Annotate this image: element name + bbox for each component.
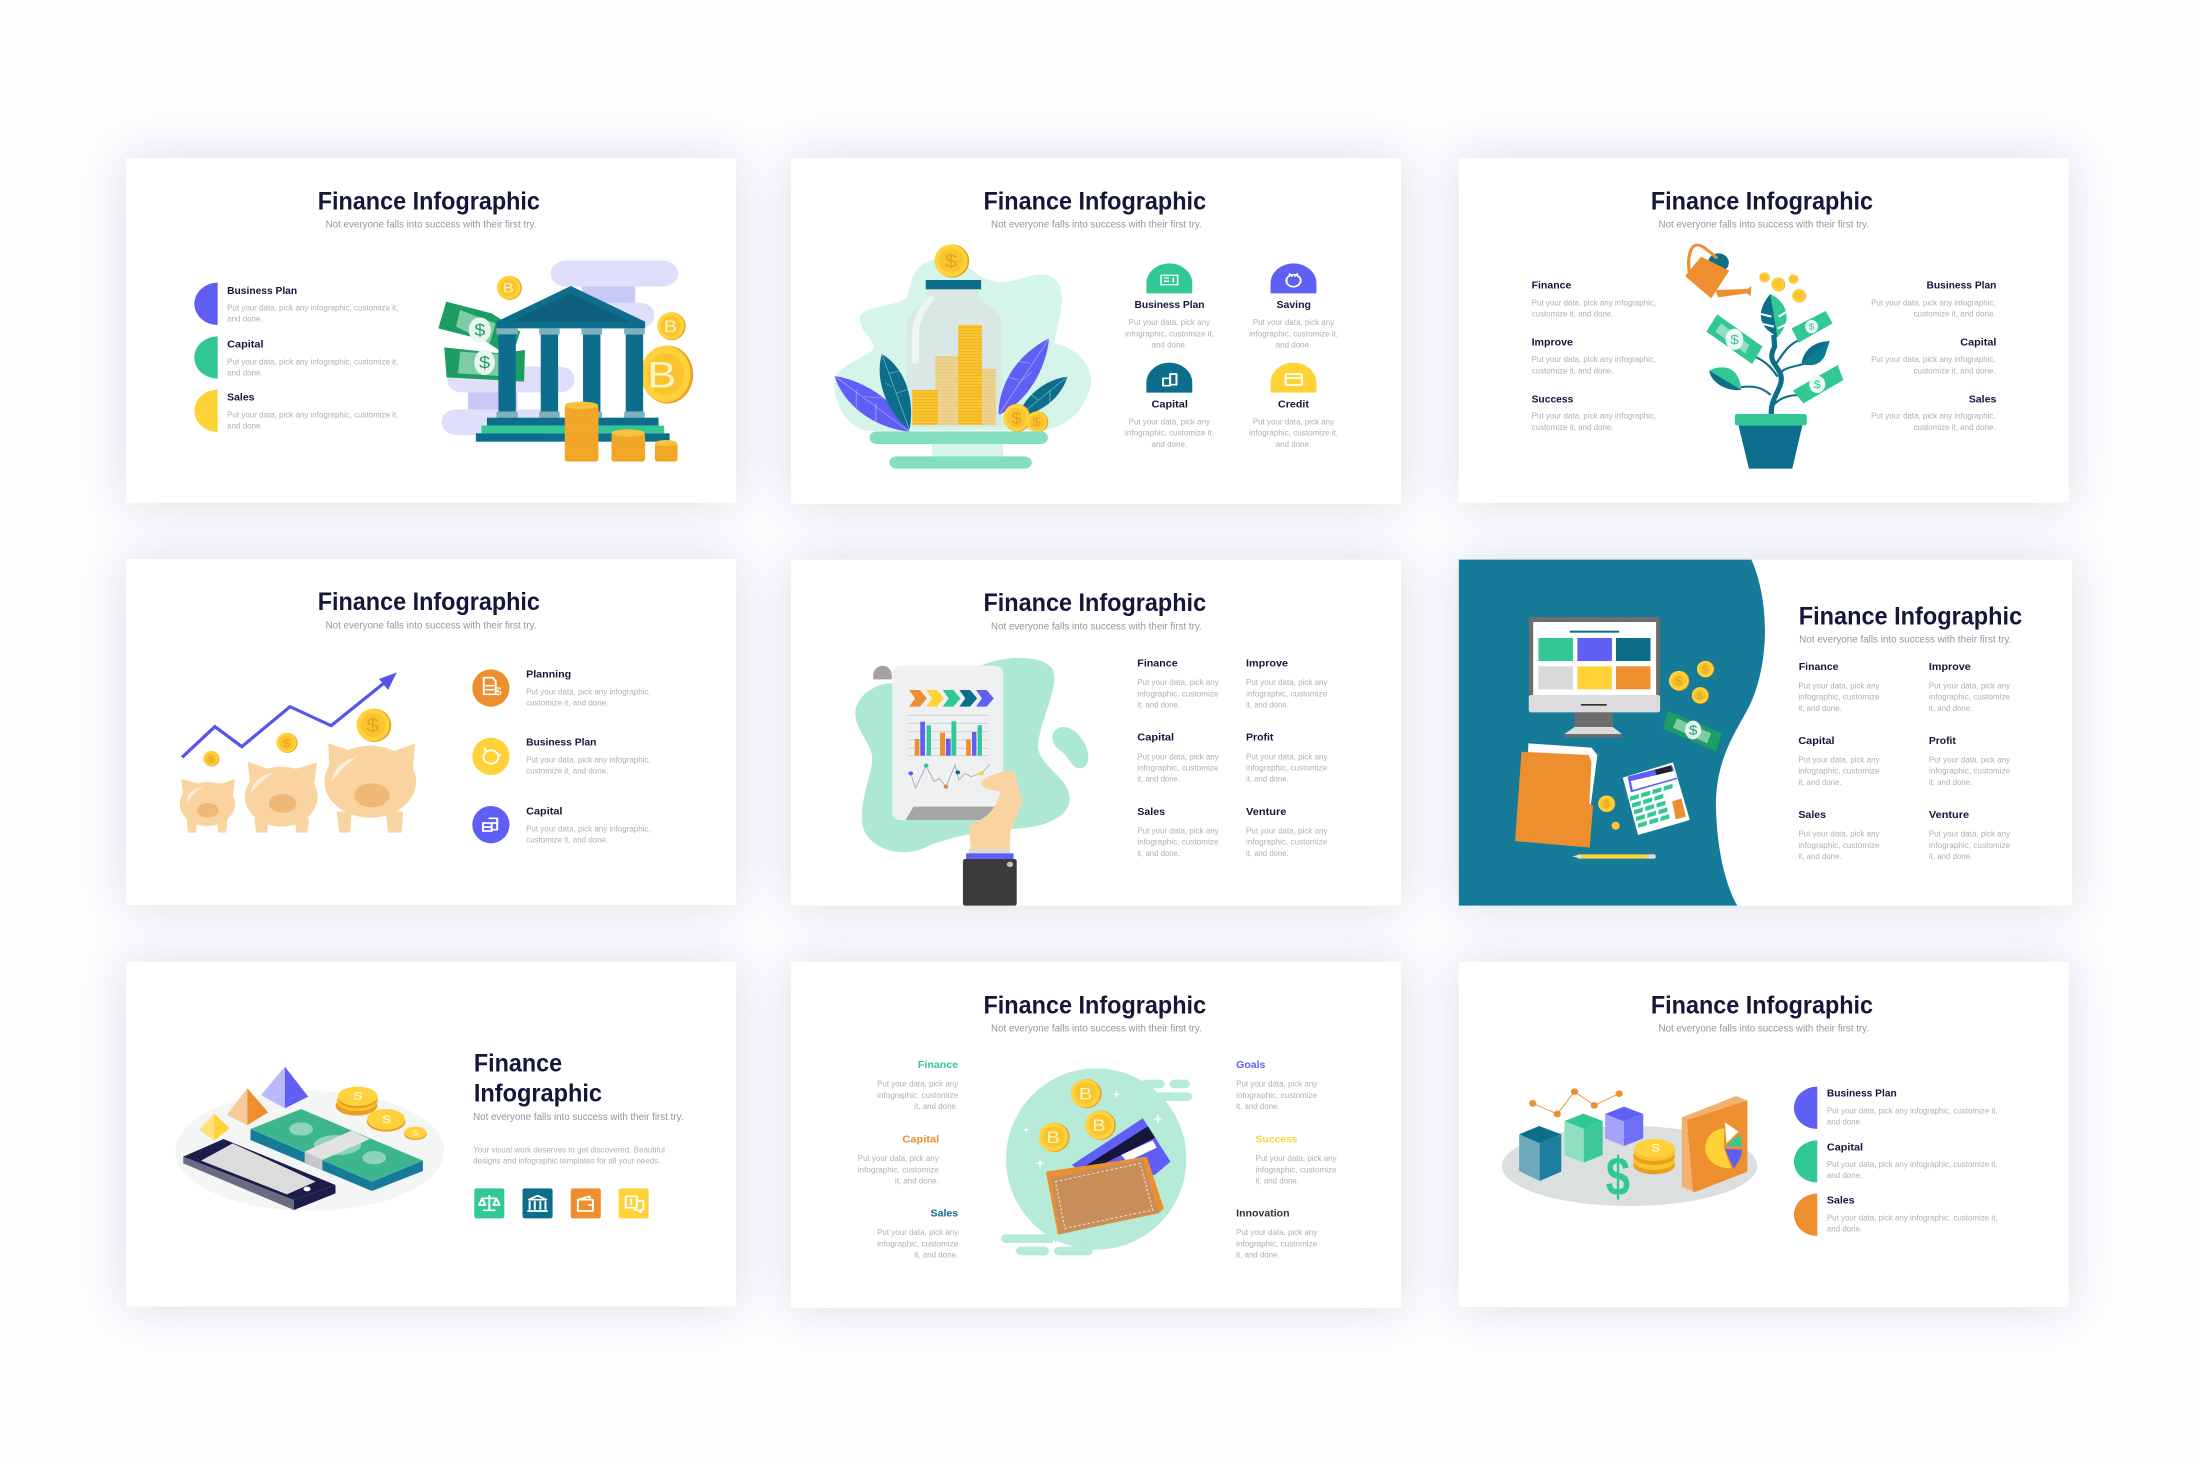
- illustration: phone, cash, coins and pyramids: S: [354, 1090, 363, 1102]
- text block: Improve: customize it, and done.: [1532, 366, 1614, 375]
- illustration: three piggy banks with coins: $: [208, 755, 215, 765]
- text block: Improve: infographic, customize: [1929, 692, 2010, 701]
- subtitle: Not everyone falls into success with their first try.: [473, 1112, 683, 1123]
- illustration: isometric bars, coins and book: S: [1651, 1142, 1660, 1154]
- text block: Capital: Put your data, pick any infographic, customize it,: [227, 357, 398, 366]
- panel: bank: [126, 158, 736, 503]
- text block: Sales: [1827, 1196, 1998, 1233]
- icon: scales: [474, 1188, 504, 1218]
- text block: Improve: [1929, 662, 2010, 713]
- illustration: bank with coins and money: $: [474, 320, 485, 339]
- text block: Finance: Put your data, pick any: [1137, 678, 1219, 687]
- text block: Success: Success: [1532, 394, 1573, 405]
- text block: Success: [1532, 394, 1656, 432]
- title: Finance: [474, 1049, 562, 1077]
- text block: Business Plan: [1125, 300, 1214, 349]
- text block: Business Plan: Put your data, pick any infographic,: [1871, 298, 1996, 307]
- icon: half circle purple: [1794, 1087, 1817, 1129]
- text block: Capital: [526, 806, 651, 844]
- text block: description: [473, 1145, 665, 1165]
- panel: wallet: [791, 962, 1401, 1308]
- text block: Sales: it, and done.: [1798, 852, 1842, 861]
- text block: Improve: Put your data, pick any: [1246, 678, 1328, 687]
- text block: Planning: [526, 669, 651, 707]
- text block: Business Plan: Business Plan: [227, 286, 297, 297]
- text block: Business Plan: [227, 286, 398, 323]
- panel: report in hand: [791, 560, 1401, 906]
- text block: Success: customize it, and done.: [1532, 423, 1614, 432]
- text block: Capital: Capital: [1137, 732, 1174, 743]
- illustration: phone, cash, coins and pyramids: S: [412, 1129, 418, 1137]
- illustration: bank with coins and money: [438, 261, 693, 462]
- text block: Capital: Put your data, pick any infographic,: [526, 824, 651, 833]
- text block: Improve: Put your data, pick any: [1929, 681, 2010, 690]
- text block: Planning: Put your data, pick any infographic,: [526, 687, 651, 696]
- text block: Sales: customize it, and done.: [1914, 423, 1996, 432]
- text block: Profit: it, and done.: [1246, 774, 1289, 783]
- subtitle: Not everyone falls into success with their first try.: [991, 219, 1202, 230]
- text block: Finance: [1798, 662, 1880, 713]
- illustration: coins and banknote: [1598, 661, 1722, 830]
- text block: Finance: [1137, 658, 1219, 709]
- icon: half circle green: [194, 336, 218, 379]
- text block: Profit: infographic, customize: [1246, 763, 1327, 772]
- icon: piggy: [472, 738, 509, 775]
- icon: credit dome: [1271, 363, 1316, 393]
- text block: Capital: [1871, 338, 1996, 375]
- panel: piggy banks: [126, 559, 736, 905]
- illustration: coins and banknote: $: [1603, 799, 1610, 810]
- text block: Credit: [1249, 399, 1338, 449]
- text block: Planning: customize it, and done.: [526, 698, 608, 707]
- panel: money plant: [1459, 158, 2069, 503]
- icon: saving dome: [1271, 263, 1316, 293]
- text block: Venture: infographic, customize: [1929, 841, 2010, 850]
- text block: Capital: infographic, customize: [1137, 763, 1218, 772]
- text block: Sales: Sales: [227, 392, 254, 403]
- text block: Finance: [877, 1060, 959, 1111]
- text block: Venture: Put your data, pick any: [1929, 829, 2010, 838]
- text block: Business Plan: Put your data, pick any: [1129, 318, 1210, 327]
- text block: Credit: and done.: [1276, 440, 1311, 449]
- illustration: coin jar with leaves: $: [1033, 415, 1041, 429]
- text block: Sales: Sales: [1137, 807, 1165, 818]
- text block: Success: Success: [1256, 1134, 1297, 1145]
- background: teal wave: [1459, 560, 1765, 906]
- text block: Capital: Put your data, pick any infographic, customize it,: [1827, 1160, 1998, 1169]
- text block: Finance: infographic, customize: [1137, 689, 1218, 698]
- text block: Improve: [1246, 658, 1328, 709]
- text block: Credit: infographic, customize it,: [1249, 428, 1338, 437]
- text block: Capital: [1827, 1142, 1998, 1180]
- text block: Planning: Planning: [526, 669, 571, 680]
- title: Finance Infographic: [318, 587, 540, 615]
- text block: Venture: it, and done.: [1246, 849, 1289, 858]
- text block: Improve: Improve: [1929, 662, 1971, 673]
- text block: Capital: Capital: [1152, 399, 1188, 410]
- text block: Finance: it, and done.: [1798, 704, 1842, 713]
- text block: Improve: Put your data, pick any infographic,: [1532, 355, 1656, 364]
- text block: Capital: [1137, 732, 1219, 783]
- text block: Capital: and done.: [227, 368, 263, 377]
- text block: Business Plan: and done.: [1152, 340, 1187, 349]
- text block: Sales: Sales: [1827, 1196, 1855, 1206]
- text block: Profit: it, and done.: [1929, 778, 1972, 787]
- title: Finance Infographic: [1651, 187, 1873, 215]
- text block: Capital: infographic, customize: [858, 1165, 939, 1174]
- illustration: coin jar with leaves: $: [945, 251, 958, 272]
- text block: Finance: customize it, and done.: [1532, 309, 1614, 318]
- text block: Innovation: Innovation: [1236, 1208, 1290, 1219]
- text block: Capital: [1798, 736, 1880, 787]
- text block: Capital: customize it, and done.: [526, 835, 608, 844]
- text block: Sales: Put your data, pick any infographic, customize it,: [227, 410, 398, 419]
- text block: Profit: [1929, 736, 2010, 787]
- text block: Venture: Put your data, pick any: [1246, 826, 1328, 835]
- text block: Venture: Venture: [1929, 810, 1969, 821]
- illustration: watering can and money plant: [1685, 245, 1843, 469]
- icon: half circle green: [1794, 1140, 1817, 1183]
- text block: Finance: Finance: [1137, 658, 1178, 669]
- text block: Goals: Put your data, pick any: [1236, 1079, 1318, 1088]
- illustration: bank with coins and money: B: [503, 281, 514, 296]
- illustration: watering can and money plant: $: [1809, 322, 1815, 332]
- text block: description: Your visual work deserves to get discovered. Beautiful: [473, 1145, 665, 1154]
- illustration: isometric bars, coins and book: [1502, 1088, 1757, 1207]
- text block: Finance: Finance: [1799, 662, 1839, 673]
- panel: savings jar: [791, 158, 1401, 504]
- icon: capital dome: [1146, 363, 1192, 393]
- text block: Sales: infographic, customize: [1137, 837, 1218, 846]
- text block: Profit: Put your data, pick any: [1929, 755, 2010, 764]
- subtitle: Not everyone falls into success with their first try.: [1659, 1023, 1869, 1034]
- illustration: coin jar with leaves: [834, 244, 1091, 469]
- text block: Business Plan: Business Plan: [1135, 300, 1205, 311]
- text block: Venture: [1246, 807, 1328, 858]
- illustration: coins and banknote: $: [1689, 723, 1698, 737]
- text block: Capital: infographic, customize: [1798, 766, 1880, 775]
- text block: Venture: infographic, customize: [1246, 837, 1327, 846]
- text block: Sales: Put your data, pick any: [1137, 826, 1219, 835]
- text block: Capital: infographic, customize it,: [1125, 428, 1214, 437]
- text block: Finance: infographic, customize: [877, 1091, 958, 1100]
- text block: Success: Put your data, pick any: [1256, 1154, 1337, 1163]
- text block: Finance: Put your data, pick any: [1798, 681, 1880, 690]
- text block: Capital: customize it, and done.: [1914, 366, 1996, 375]
- text block: Profit: Profit: [1929, 736, 1956, 747]
- text block: Capital: Put your data, pick any: [1137, 752, 1219, 761]
- text block: Sales: infographic, customize: [877, 1239, 958, 1248]
- icon: half circle orange: [1794, 1194, 1817, 1236]
- text block: Sales: [877, 1208, 959, 1259]
- text block: Finance: Finance: [918, 1060, 958, 1071]
- subtitle: Not everyone falls into success with their first try.: [1659, 219, 1869, 230]
- illustration: coin jar with leaves: $: [1011, 410, 1022, 427]
- panel: isometric money: [126, 962, 736, 1307]
- text block: Sales: Put your data, pick any: [877, 1228, 959, 1237]
- title: Finance Infographic: [318, 187, 540, 215]
- subtitle: Not everyone falls into success with their first try.: [1799, 635, 2011, 645]
- text block: Saving: and done.: [1276, 340, 1311, 349]
- text block: Sales: it, and done.: [914, 1250, 958, 1259]
- text block: Business Plan: Business Plan: [526, 737, 597, 748]
- text block: Success: [1256, 1134, 1337, 1185]
- panel: isometric chart: [1459, 962, 2069, 1307]
- text block: Business Plan: [526, 737, 651, 775]
- text block: Goals: Goals: [1236, 1060, 1265, 1071]
- text block: Sales: [227, 392, 398, 430]
- text block: Capital: and done.: [1827, 1171, 1862, 1180]
- illustration: hand holding report: [855, 658, 1088, 906]
- text block: Business Plan: and done.: [227, 314, 263, 323]
- text block: Capital: Put your data, pick any: [1129, 417, 1210, 426]
- text block: Capital: it, and done.: [895, 1176, 939, 1185]
- text block: Improve: Improve: [1532, 338, 1573, 348]
- text block: Sales: Sales: [931, 1208, 958, 1219]
- subtitle: Not everyone falls into success with their first try.: [326, 620, 536, 631]
- text block: Business Plan: [1871, 281, 1997, 318]
- text block: Improve: it, and done.: [1929, 704, 1972, 713]
- subtitle: Not everyone falls into success with their first try.: [991, 621, 1202, 632]
- title: Finance Infographic: [983, 187, 1206, 215]
- icon: business plan dome: [1146, 263, 1192, 293]
- text block: Profit: [1246, 732, 1328, 783]
- text block: Capital: Capital: [526, 806, 562, 817]
- illustration: isometric bars, coins and book: $: [1606, 1146, 1630, 1207]
- title: Finance Infographic: [983, 991, 1206, 1019]
- icon: half circle blue: [194, 283, 218, 325]
- text block: Venture: Venture: [1246, 807, 1286, 818]
- text block: Capital: Capital: [1827, 1142, 1863, 1153]
- text block: Venture: it, and done.: [1929, 852, 1972, 861]
- icon: bank: [523, 1188, 553, 1218]
- title: Finance Infographic: [1651, 991, 1873, 1019]
- illustration: bank with coins and money: B: [664, 317, 677, 336]
- illustration: coins and banknote: $: [1702, 665, 1708, 675]
- text block: Credit: Credit: [1278, 399, 1309, 410]
- text block: Capital: Capital: [1798, 736, 1835, 747]
- illustration: phone, cash, coins and pyramids: [175, 1067, 444, 1211]
- text block: Sales: [1798, 810, 1880, 861]
- text block: Sales: infographic, customize: [1798, 841, 1880, 850]
- illustration: folder: [1515, 743, 1597, 848]
- text block: Improve: Improve: [1246, 658, 1288, 669]
- subtitle: Not everyone falls into success with their first try.: [326, 219, 536, 230]
- icon: chat: [619, 1188, 649, 1218]
- text block: Finance: Put your data, pick any: [877, 1079, 959, 1088]
- text block: Innovation: [1236, 1208, 1318, 1259]
- text block: Saving: [1249, 300, 1338, 349]
- text block: Business Plan: Business Plan: [1927, 281, 1997, 291]
- text block: Capital: [1125, 399, 1214, 449]
- icon: wallet: [571, 1188, 601, 1218]
- text block: Capital: Put your data, pick any: [858, 1154, 939, 1163]
- text block: Innovation: it, and done.: [1236, 1250, 1280, 1259]
- icon: coins: [472, 806, 509, 843]
- title: Finance Infographic: [983, 588, 1206, 616]
- illustration: wallet with card and bitcoins: B: [1079, 1084, 1092, 1103]
- text block: Sales: and done.: [227, 421, 263, 430]
- text block: Business Plan: and done.: [1827, 1117, 1862, 1126]
- text block: Capital: [227, 339, 398, 377]
- text block: Improve: infographic, customize: [1246, 689, 1327, 698]
- illustration: coins and banknote: $: [1675, 674, 1683, 688]
- illustration: calculator: [1623, 762, 1690, 835]
- text block: Saving: infographic, customize it,: [1249, 329, 1338, 338]
- illustration: wallet with card and bitcoins: [1001, 1068, 1192, 1255]
- text block: Profit: Put your data, pick any: [1246, 752, 1328, 761]
- text block: Sales: Sales: [1969, 394, 1996, 405]
- text block: Business Plan: customize it, and done.: [526, 766, 608, 775]
- text block: Saving: Saving: [1276, 300, 1311, 311]
- text block: Profit: infographic, customize: [1929, 766, 2010, 775]
- illustration: watering can and money plant: $: [1814, 378, 1821, 391]
- text block: Profit: Profit: [1246, 732, 1274, 743]
- text block: Business Plan: infographic, customize it,: [1125, 329, 1214, 338]
- text block: Improve: [1532, 338, 1656, 375]
- text block: description: designs and infographic templates for all your needs.: [473, 1156, 661, 1165]
- text block: Finance: Put your data, pick any infographic,: [1532, 298, 1656, 307]
- text block: Business Plan: Business Plan: [1827, 1089, 1897, 1099]
- text block: Saving: Put your data, pick any: [1253, 318, 1335, 327]
- text block: Goals: infographic, customize: [1236, 1091, 1317, 1100]
- text block: Capital: Put your data, pick any infographic,: [1871, 355, 1996, 364]
- text block: Success: it, and done.: [1256, 1176, 1299, 1185]
- illustration: three piggy banks with coins: [180, 709, 416, 833]
- text block: Innovation: infographic, customize: [1236, 1239, 1317, 1248]
- illustration: pencil: [1572, 854, 1656, 859]
- text block: Success: Put your data, pick any infographic,: [1532, 411, 1656, 420]
- text block: Sales: Sales: [1798, 810, 1826, 821]
- illustration: wallet with card and bitcoins: B: [1092, 1116, 1106, 1135]
- illustration: three piggy banks with coins: $: [366, 716, 379, 737]
- panel: teal workspace: [1459, 560, 2072, 906]
- text block: Success: infographic, customize: [1256, 1165, 1337, 1174]
- text block: Sales: [1137, 807, 1219, 858]
- text block: Business Plan: [1827, 1089, 1998, 1126]
- subtitle: Not everyone falls into success with their first try.: [991, 1023, 1202, 1034]
- illustration: coins and banknote: $: [1697, 691, 1703, 702]
- text block: Capital: Capital: [1960, 338, 1996, 348]
- text block: Sales: and done.: [1827, 1224, 1862, 1233]
- text block: Venture: [1929, 810, 2010, 861]
- text block: Capital: Put your data, pick any: [1798, 755, 1880, 764]
- text block: Sales: it, and done.: [1137, 849, 1180, 858]
- illustration: three piggy banks with coins: $: [283, 737, 290, 750]
- illustration: watering can and money plant: $: [1730, 332, 1739, 347]
- text block: Business Plan: Put your data, pick any infographic,: [526, 755, 651, 764]
- text block: Sales: Put your data, pick any infographic, customize it,: [1827, 1213, 1998, 1222]
- text block: Capital: [858, 1134, 939, 1185]
- illustration: bank with coins and money: $: [479, 353, 490, 372]
- text block: Finance: infographic, customize: [1798, 692, 1880, 701]
- text block: Sales: [1871, 394, 1996, 432]
- title: Finance Infographic: [1799, 602, 2022, 630]
- illustration: monitor: [1529, 617, 1660, 737]
- icon: half circle yellow: [194, 390, 218, 432]
- text block: Capital: and done.: [1152, 440, 1187, 449]
- text block: Finance: Finance: [1532, 281, 1571, 291]
- icon: planning: $: [494, 685, 502, 698]
- text block: Sales: Put your data, pick any: [1798, 829, 1880, 838]
- text block: Finance: [1532, 281, 1656, 318]
- text block: Sales: Put your data, pick any infographic,: [1871, 411, 1996, 420]
- text block: Finance: it, and done.: [914, 1102, 958, 1111]
- text block: Business Plan: customize it, and done.: [1914, 309, 1996, 318]
- text block: Capital: it, and done.: [1137, 774, 1180, 783]
- title: Infographic: [474, 1079, 602, 1107]
- text block: Improve: it, and done.: [1246, 700, 1289, 709]
- illustration: phone, cash, coins and pyramids: S: [382, 1113, 391, 1126]
- title: [474, 1049, 602, 1107]
- text block: Innovation: Put your data, pick any: [1236, 1228, 1318, 1237]
- text block: Capital: Capital: [227, 339, 264, 350]
- illustration: bank with coins and money: B: [647, 355, 676, 396]
- text block: Business Plan: Put your data, pick any infographic, customize it,: [227, 303, 398, 312]
- text block: Goals: [1236, 1060, 1318, 1111]
- text block: Capital: it, and done.: [1798, 778, 1842, 787]
- chart: rising arrow line: [182, 672, 397, 757]
- icon: planning: [472, 669, 509, 707]
- text block: Business Plan: Put your data, pick any infographic, customize it,: [1827, 1106, 1998, 1115]
- text block: Credit: Put your data, pick any: [1253, 417, 1335, 426]
- text block: Finance: it, and done.: [1137, 700, 1180, 709]
- text block: Capital: Capital: [902, 1134, 939, 1145]
- illustration: wallet with card and bitcoins: B: [1046, 1128, 1060, 1147]
- text block: Goals: it, and done.: [1236, 1102, 1280, 1111]
